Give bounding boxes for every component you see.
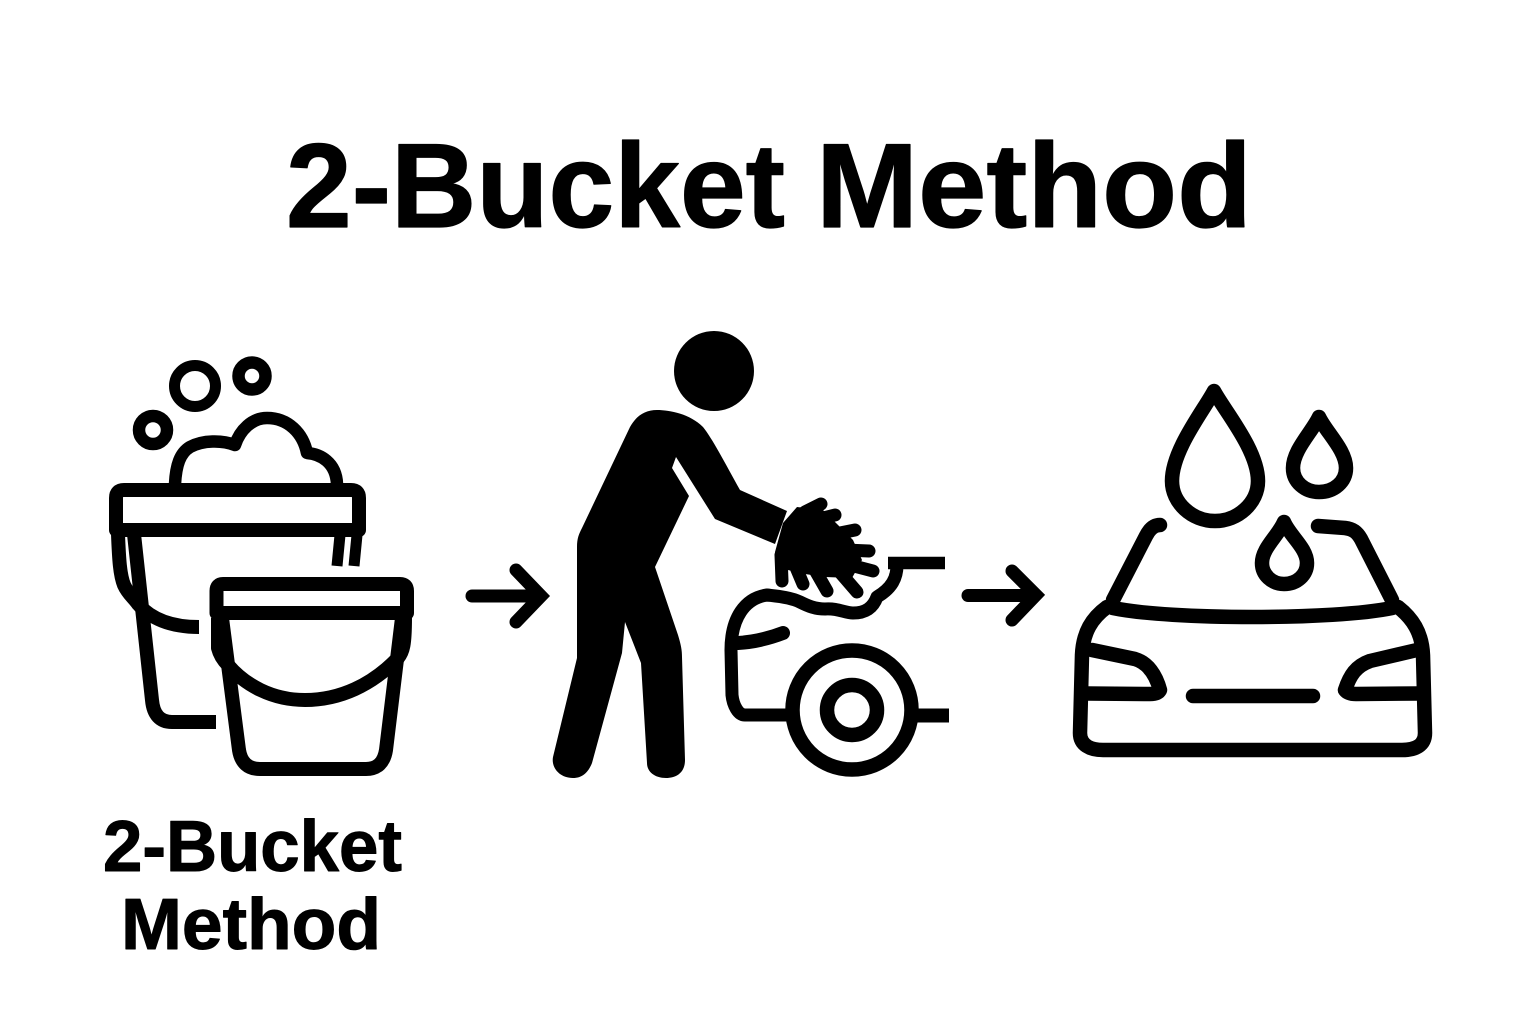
medium drop	[1293, 417, 1346, 492]
small drop	[1262, 522, 1307, 584]
label: 2-Bucket Method: Method	[121, 885, 381, 965]
wheel hub	[827, 685, 877, 735]
icon: two buckets with foam	[116, 362, 407, 769]
gloved hand	[775, 504, 873, 592]
label: 2-Bucket Method	[103, 807, 402, 965]
person head	[674, 331, 754, 411]
car rear outline	[731, 565, 897, 715]
label: 2-Bucket Method: 2-Bucket	[103, 807, 402, 887]
title: 2-Bucket	[286, 119, 785, 253]
bubbles	[139, 362, 266, 444]
bumper line	[917, 708, 949, 722]
grille	[1193, 689, 1313, 703]
arrow: first	[472, 570, 541, 622]
sponge top line	[888, 557, 945, 569]
large drop	[1172, 391, 1258, 521]
foam	[175, 418, 337, 484]
arrow: second	[968, 571, 1036, 620]
car body	[1080, 607, 1425, 750]
front bucket	[216, 584, 407, 769]
icon: clean car with water drops	[1080, 391, 1425, 750]
right headlight	[1345, 650, 1418, 694]
title: Method	[816, 119, 1252, 253]
car side line	[738, 633, 783, 643]
right pillar	[1318, 526, 1392, 600]
person body	[553, 410, 787, 778]
left pillar	[1113, 525, 1160, 600]
icon: person washing car	[553, 331, 949, 778]
wheel	[792, 650, 912, 770]
hood line	[1113, 608, 1392, 617]
left headlight	[1087, 650, 1160, 694]
back bucket	[116, 490, 359, 722]
title	[286, 119, 1252, 253]
